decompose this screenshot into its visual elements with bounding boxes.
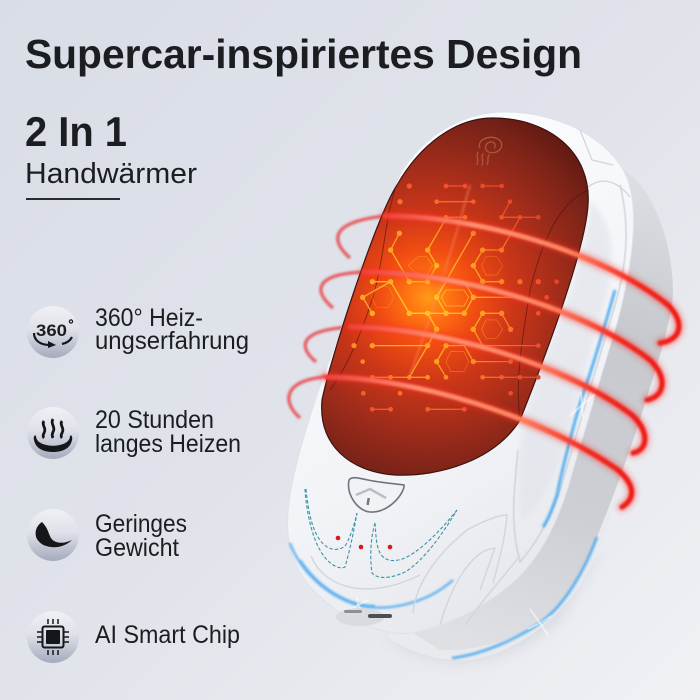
logo [477, 137, 502, 166]
ring backs [289, 216, 385, 418]
lower blue light line [452, 537, 597, 658]
blue light line [543, 290, 615, 527]
title: Supercar-inspiriertes Design [25, 31, 582, 77]
icon: chip [27, 611, 79, 663]
label: 360 degree: ungserfahrung [95, 327, 249, 355]
icon: feather [27, 509, 79, 561]
heading: 2 In 1 Handwärmer [25, 108, 197, 200]
icon: heat waves over bowl [27, 407, 79, 459]
panel curve highlights [330, 190, 588, 420]
label: 360 degree: 360° Heiz- [95, 304, 203, 332]
label: 20 hours [95, 406, 241, 458]
feature: low weight [27, 509, 187, 562]
feature: 20 hours [27, 406, 241, 459]
feature: AI smart chip [27, 611, 240, 663]
device front body [288, 112, 634, 634]
circuit network [351, 183, 559, 412]
side shading [518, 200, 612, 520]
label: AI smart chip: AI Smart Chip [95, 621, 240, 649]
label: 360 degree [95, 304, 249, 355]
feature: 360 degree heating [27, 304, 249, 358]
heading: 2 In 1 Handwärmer: Handwärmer [25, 158, 197, 190]
icon: 360 degrees: 360 [36, 321, 67, 340]
label: 20 hours: 20 Stunden [95, 406, 214, 434]
side seam [514, 185, 626, 562]
label: low weight [95, 510, 187, 562]
device back shell [387, 165, 673, 660]
heading: 2 In 1 Handwärmer: 2 In 1 [25, 108, 127, 155]
label: low weight: Geringes [95, 510, 187, 538]
USB-C port [336, 608, 392, 626]
heat panel [322, 118, 588, 475]
body relief lines [311, 515, 520, 625]
power button [349, 478, 404, 512]
glow rings front [325, 216, 679, 507]
label: 20 hours: langes Heizen [95, 430, 241, 458]
hand warmer device [288, 112, 679, 662]
dashed swoosh lines [305, 489, 457, 577]
device soft shadow [390, 550, 600, 662]
label: low weight: Gewicht [95, 534, 179, 562]
indicator dots [336, 536, 392, 549]
top seam [580, 130, 630, 197]
sparkles [345, 392, 594, 635]
light streak [410, 185, 470, 375]
back shell grey face [413, 168, 673, 650]
icon: 360 degrees [27, 306, 79, 358]
blue arc on front [290, 543, 453, 608]
